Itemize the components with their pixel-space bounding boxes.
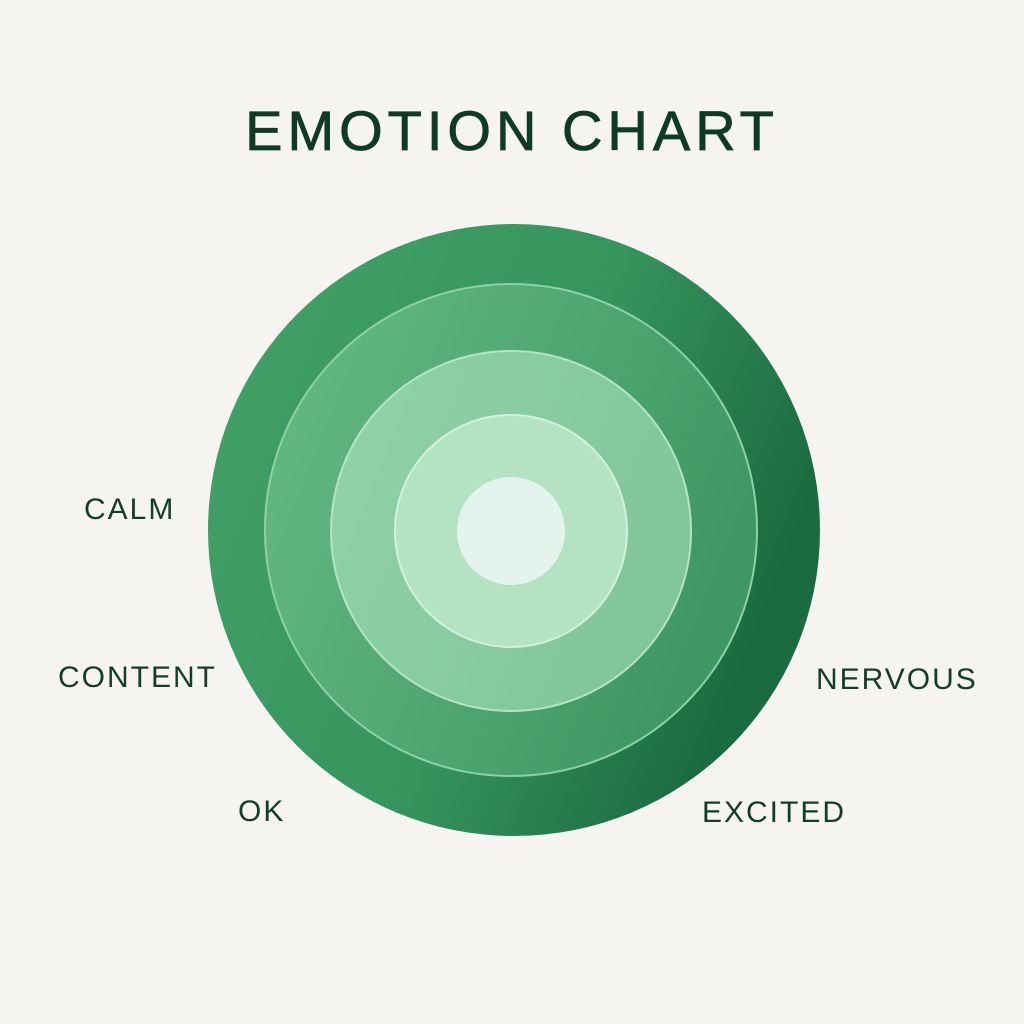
ring: second [265, 284, 757, 776]
title: EMOTION CHART [245, 99, 779, 162]
label: nervous: NERVOUS [816, 663, 978, 696]
ring: fourth [395, 415, 627, 647]
label: ok: OK [238, 795, 285, 828]
label: content: CONTENT [58, 661, 217, 694]
ring: third [331, 351, 691, 711]
ring: outer [208, 224, 820, 836]
label: calm: CALM [84, 493, 175, 526]
ring: center [457, 477, 565, 585]
label: excited: EXCITED [702, 796, 846, 829]
